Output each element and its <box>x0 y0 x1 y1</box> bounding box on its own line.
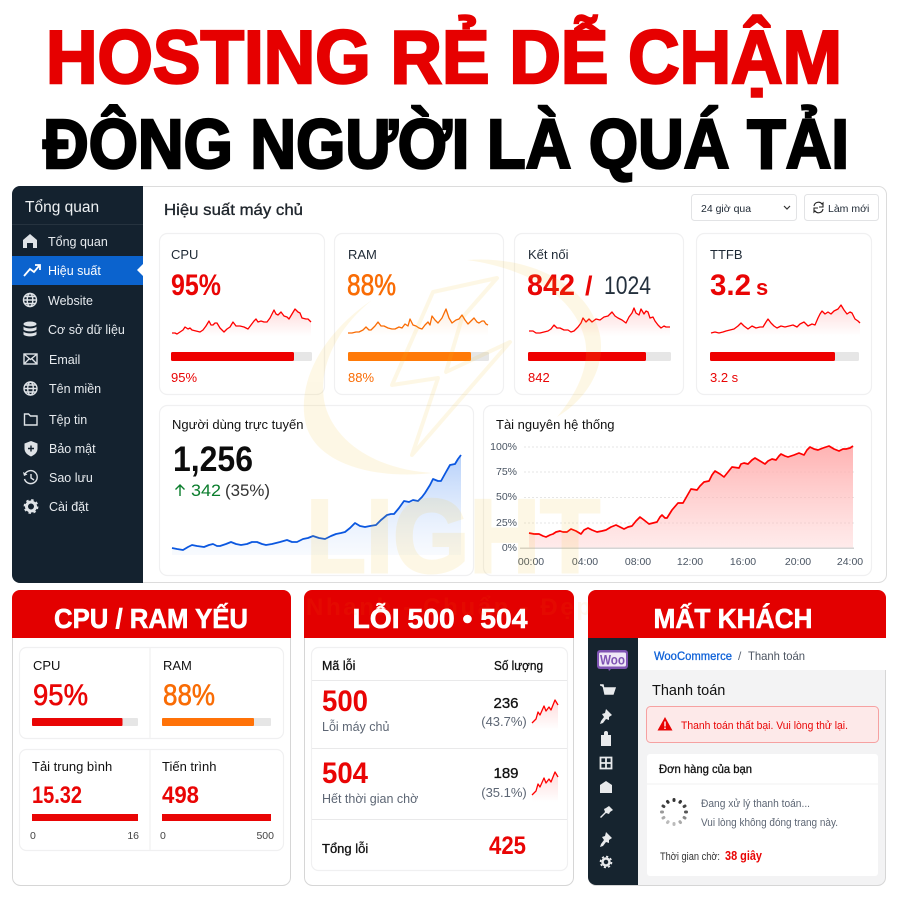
load and process stats: 500 <box>256 830 274 842</box>
sparkline: RAM <box>348 309 488 336</box>
order card: Đơn hàng của bạn <box>659 762 752 776</box>
menu: Cơ sở dữ liệu <box>24 322 125 337</box>
watermark logo <box>304 259 601 595</box>
menu: Email <box>24 353 80 367</box>
menu: Sao lưu: Sao lưu <box>49 471 93 485</box>
panel header <box>588 590 886 638</box>
breadcrumb: WooCommerce <box>654 649 732 663</box>
CPU and RAM stats: 88% <box>163 679 215 712</box>
row: 504: (35.1%) <box>481 785 527 800</box>
row: 504 <box>322 757 558 806</box>
CPU and RAM stats <box>20 648 284 738</box>
checkout heading: Thanh toán <box>652 683 725 699</box>
sidebar <box>12 186 143 583</box>
woo sidebar <box>588 638 638 885</box>
trend delta: 342 <box>191 481 221 500</box>
menu: Cơ sở dữ liệu: Cơ sở dữ liệu <box>48 323 125 337</box>
menu: Tệp tin <box>24 413 87 427</box>
card: Kết nối: 842 <box>527 269 575 302</box>
area chart: system resources: 00:00 <box>518 556 544 568</box>
card: TTFB: s <box>756 275 768 300</box>
menu: Tổng quan <box>23 234 108 249</box>
row: 500: 500 <box>322 685 368 718</box>
icon: cart <box>600 685 615 694</box>
area chart: system resources: 25% <box>496 517 517 529</box>
card: TTFB: 3.2 <box>710 269 751 302</box>
main heading: Hiệu suất máy chủ <box>164 202 303 219</box>
payment failed alert: Thanh toán thất bại. Vui lòng thử lại. <box>681 720 848 732</box>
card: online users <box>160 406 474 576</box>
icon: gear <box>600 856 612 868</box>
menu: Tên miền <box>24 382 101 396</box>
active menu item: Hiệu suất <box>48 264 101 278</box>
load and process stats: 498 <box>162 782 199 809</box>
card: system resources <box>484 406 872 576</box>
payment failed alert <box>646 706 878 742</box>
icon: Woo logo: Woo <box>600 652 625 668</box>
icon: mail box <box>600 781 612 793</box>
card: TTFB: 3.2 s <box>710 370 739 385</box>
card: CPU: 95% <box>171 269 221 302</box>
breadcrumb: / <box>738 649 742 663</box>
row: 500: Lỗi máy chủ <box>322 719 389 734</box>
card: TTFB: TTFB <box>710 247 742 262</box>
order card: 38 giây <box>725 849 762 863</box>
area chart: system resources: 16:00 <box>730 556 756 568</box>
icon: brush <box>600 806 613 818</box>
panel header: CPU / RAM YẾU <box>54 603 248 634</box>
panel: lỗi 500 504 <box>304 590 574 886</box>
panel header: LỖI 500 • 504 <box>352 603 528 634</box>
sidebar: Tổng quan <box>25 199 99 216</box>
menu: Cài đặt: Cài đặt <box>49 500 89 514</box>
order card: Đang xử lý thanh toán... <box>701 798 810 810</box>
panel header <box>12 590 291 638</box>
card: Kết nối: 1024 <box>604 272 651 300</box>
icon: pin 2 <box>600 832 612 847</box>
row: 500: (43.7%) <box>481 714 527 729</box>
panel: server dashboard <box>12 186 886 583</box>
area chart: system resources: 24:00 <box>837 556 863 568</box>
CPU and RAM stats: CPU <box>33 658 60 673</box>
menu: Bảo mật <box>24 441 96 456</box>
card: online users: 1,256 <box>173 440 253 479</box>
area chart: system resources: 100% <box>490 441 517 453</box>
sparkline: TTFB <box>711 305 860 336</box>
time range select: 24 giờ qua <box>701 203 751 215</box>
sparkline: CPU <box>172 309 311 336</box>
CPU and RAM stats: RAM <box>163 658 192 673</box>
load and process stats: 16 <box>127 830 139 842</box>
row: total: Tổng lỗi <box>322 841 368 856</box>
area chart: system resources: 20:00 <box>785 556 811 568</box>
load and process stats: 15.32 <box>32 782 82 809</box>
refresh button <box>804 194 878 220</box>
area chart: system resources: 04:00 <box>572 556 598 568</box>
row: 500 <box>322 685 558 734</box>
icon: Woo logo <box>597 650 628 671</box>
load and process stats <box>20 750 284 850</box>
load and process stats: 0 <box>160 830 166 842</box>
title line 1: HOSTING RẺ DỄ CHẬM <box>46 15 842 99</box>
card: online users: Người dùng trực tuyến <box>172 417 303 432</box>
card: Kết nối: Kết nối <box>528 247 569 262</box>
card: system resources: Tài nguyên hệ thống <box>496 417 615 432</box>
area chart: system resources: 0% <box>502 542 517 554</box>
area chart: system resources: 75% <box>496 466 517 478</box>
panel header: MẤT KHÁCH <box>654 603 812 634</box>
load and process stats: Tải trung bình <box>32 759 112 774</box>
icon: pin <box>600 709 612 724</box>
icon: grid <box>600 758 612 768</box>
card: RAM <box>334 234 504 394</box>
error table: Số lượng <box>494 659 543 673</box>
card: Kết nối: / <box>585 271 593 301</box>
panel: mất khách <box>588 590 886 886</box>
card: CPU: CPU <box>171 247 198 262</box>
panel: CPU / RAM yếu <box>12 590 291 886</box>
breadcrumb: Thanh toán <box>748 649 805 663</box>
menu: Tệp tin: Tệp tin <box>49 413 87 427</box>
order card: Thời gian chờ: <box>660 851 720 863</box>
panel header <box>304 590 574 638</box>
menu: Cài đặt <box>24 500 89 514</box>
area chart: system resources: 08:00 <box>625 556 651 568</box>
icon: clipboard <box>601 731 611 746</box>
card: TTFB <box>696 234 872 394</box>
row: total <box>322 832 526 860</box>
load and process stats: Tiến trình <box>162 759 216 774</box>
sparkline: Kết nối <box>529 308 670 336</box>
menu: Website <box>24 294 93 308</box>
area chart: online users <box>172 455 461 555</box>
area chart: system resources <box>490 441 863 568</box>
error table: Mã lỗi <box>322 658 355 673</box>
load and process stats: 0 <box>30 830 36 842</box>
menu: Sao lưu <box>23 471 93 485</box>
card: RAM: RAM <box>348 247 377 262</box>
card: Kết nối <box>514 234 684 394</box>
refresh button: Làm mới <box>828 203 869 215</box>
menu: Email: Email <box>49 353 80 367</box>
breadcrumb <box>638 638 886 670</box>
active menu item <box>12 256 143 285</box>
icon: loading spinner <box>662 800 686 824</box>
order card: Vui lòng không đóng trang này. <box>701 817 838 829</box>
card: RAM: 88% <box>348 370 374 385</box>
row: 504: 189 <box>493 765 519 782</box>
watermark slogan: Nhanh - Chuẩn - Đẹp <box>306 594 591 621</box>
card: RAM: 88% <box>347 269 396 302</box>
row: 500: 236 <box>493 695 519 712</box>
menu: Tổng quan: Tổng quan <box>48 235 108 249</box>
row: 504: 504 <box>322 757 368 790</box>
row: total: 425 <box>489 832 526 860</box>
watermark logo: LIGHT <box>306 479 600 595</box>
card: Kết nối: 842 <box>528 370 550 385</box>
menu: Website: Website <box>48 294 93 308</box>
card: CPU <box>160 234 324 394</box>
time range select <box>692 194 796 220</box>
trend delta: (35%) <box>225 481 270 500</box>
row: 504: Hết thời gian chờ <box>322 792 418 806</box>
card: CPU: 95% <box>171 370 197 385</box>
area chart: system resources: 50% <box>496 491 517 503</box>
menu: Bảo mật: Bảo mật <box>49 442 96 456</box>
error table <box>312 648 568 870</box>
menu: Tên miền: Tên miền <box>49 382 101 396</box>
area chart: system resources: 12:00 <box>677 556 703 568</box>
CPU and RAM stats: 95% <box>33 679 88 712</box>
trend delta <box>176 481 270 500</box>
order card <box>647 754 878 876</box>
